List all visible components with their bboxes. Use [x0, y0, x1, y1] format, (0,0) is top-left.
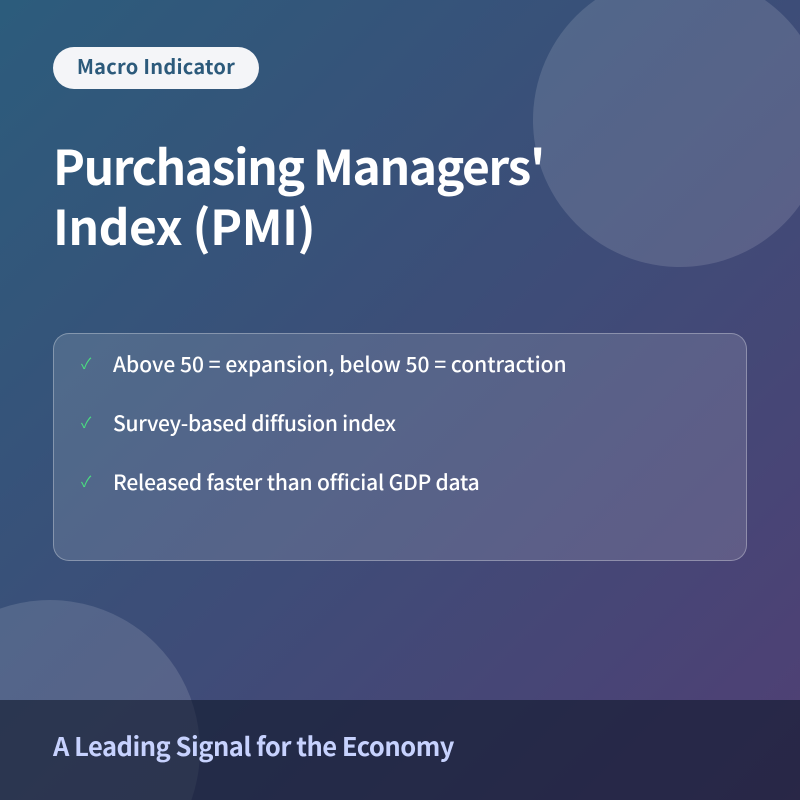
point 1: Above 50 = expansion, below 50 = contraction [113, 349, 567, 379]
point 2: Survey-based diffusion index [113, 408, 396, 438]
point 1: ✓ [81, 353, 91, 374]
footer bar [0, 700, 800, 800]
point 3: Released faster than official GDP data [113, 467, 480, 497]
panel: key points [53, 333, 747, 561]
point 3: ✓ [81, 471, 91, 492]
point 2: ✓ [81, 412, 91, 433]
badge: Macro Indicator: Macro Indicator [77, 51, 235, 80]
title: Index (PMI) [53, 189, 315, 259]
badge: Macro Indicator [53, 47, 259, 89]
footer text: A Leading Signal for the Economy [53, 727, 454, 764]
title [53, 129, 544, 259]
title: Purchasing Managers' [53, 129, 544, 199]
